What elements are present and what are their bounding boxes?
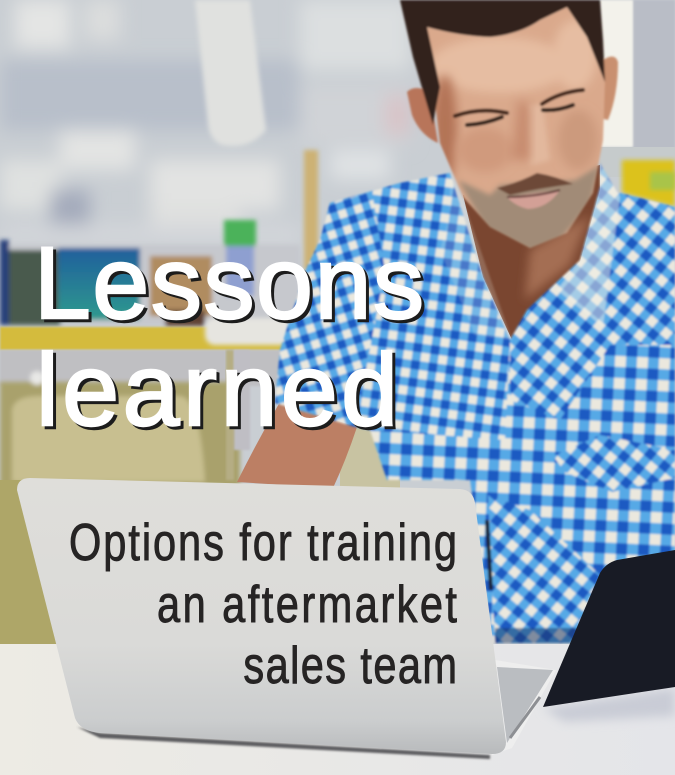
title shadow: Lessons — [37, 229, 427, 343]
laptop — [17, 478, 556, 759]
left collar — [440, 173, 512, 340]
stubble — [458, 165, 600, 252]
dark tablet — [543, 550, 675, 707]
desk — [0, 644, 675, 775]
subtitle: Options for training — [69, 513, 457, 571]
eyebrows — [455, 90, 583, 116]
laptop lid — [17, 478, 506, 754]
hair — [400, 0, 605, 125]
title: Lessons learned — [34, 226, 427, 450]
yellow object — [622, 160, 675, 207]
shelf books — [0, 220, 300, 326]
right chest — [510, 187, 675, 420]
title shadow — [37, 229, 427, 450]
moustache — [497, 173, 573, 195]
table leg — [226, 350, 234, 480]
right collar — [557, 163, 620, 327]
folded shirt at the waist — [488, 495, 600, 643]
white bowl — [205, 318, 290, 345]
face shading — [430, 20, 600, 252]
man: head — [400, 0, 618, 252]
yellow pole — [304, 150, 318, 270]
lid shadow — [77, 727, 490, 759]
title shadow: learned — [39, 336, 401, 450]
right ear — [600, 56, 618, 120]
pocket flap — [553, 435, 675, 492]
man: neck — [463, 165, 600, 340]
man: blue gingham shirt — [275, 163, 675, 643]
eyes — [467, 105, 573, 125]
shirt body — [275, 173, 675, 643]
right of head: window — [632, 0, 675, 165]
face — [427, 7, 605, 248]
subtitle: sales team — [243, 636, 457, 694]
lower wall — [0, 350, 300, 386]
wall behind arm — [340, 425, 400, 490]
title text — [34, 226, 424, 447]
subtitle: an aftermarket — [157, 575, 457, 633]
title text: Lessons — [34, 226, 424, 340]
left ear — [407, 88, 438, 143]
lips — [507, 190, 560, 209]
left wall under chair — [0, 480, 60, 650]
chair — [0, 371, 240, 487]
title text: learned — [36, 333, 398, 447]
yellow table — [0, 327, 285, 350]
left shoulder and sleeve — [275, 173, 510, 440]
man: arm — [237, 402, 357, 488]
laptop base — [492, 660, 556, 755]
white hanging sign — [195, 0, 266, 146]
subtitle — [69, 513, 457, 694]
